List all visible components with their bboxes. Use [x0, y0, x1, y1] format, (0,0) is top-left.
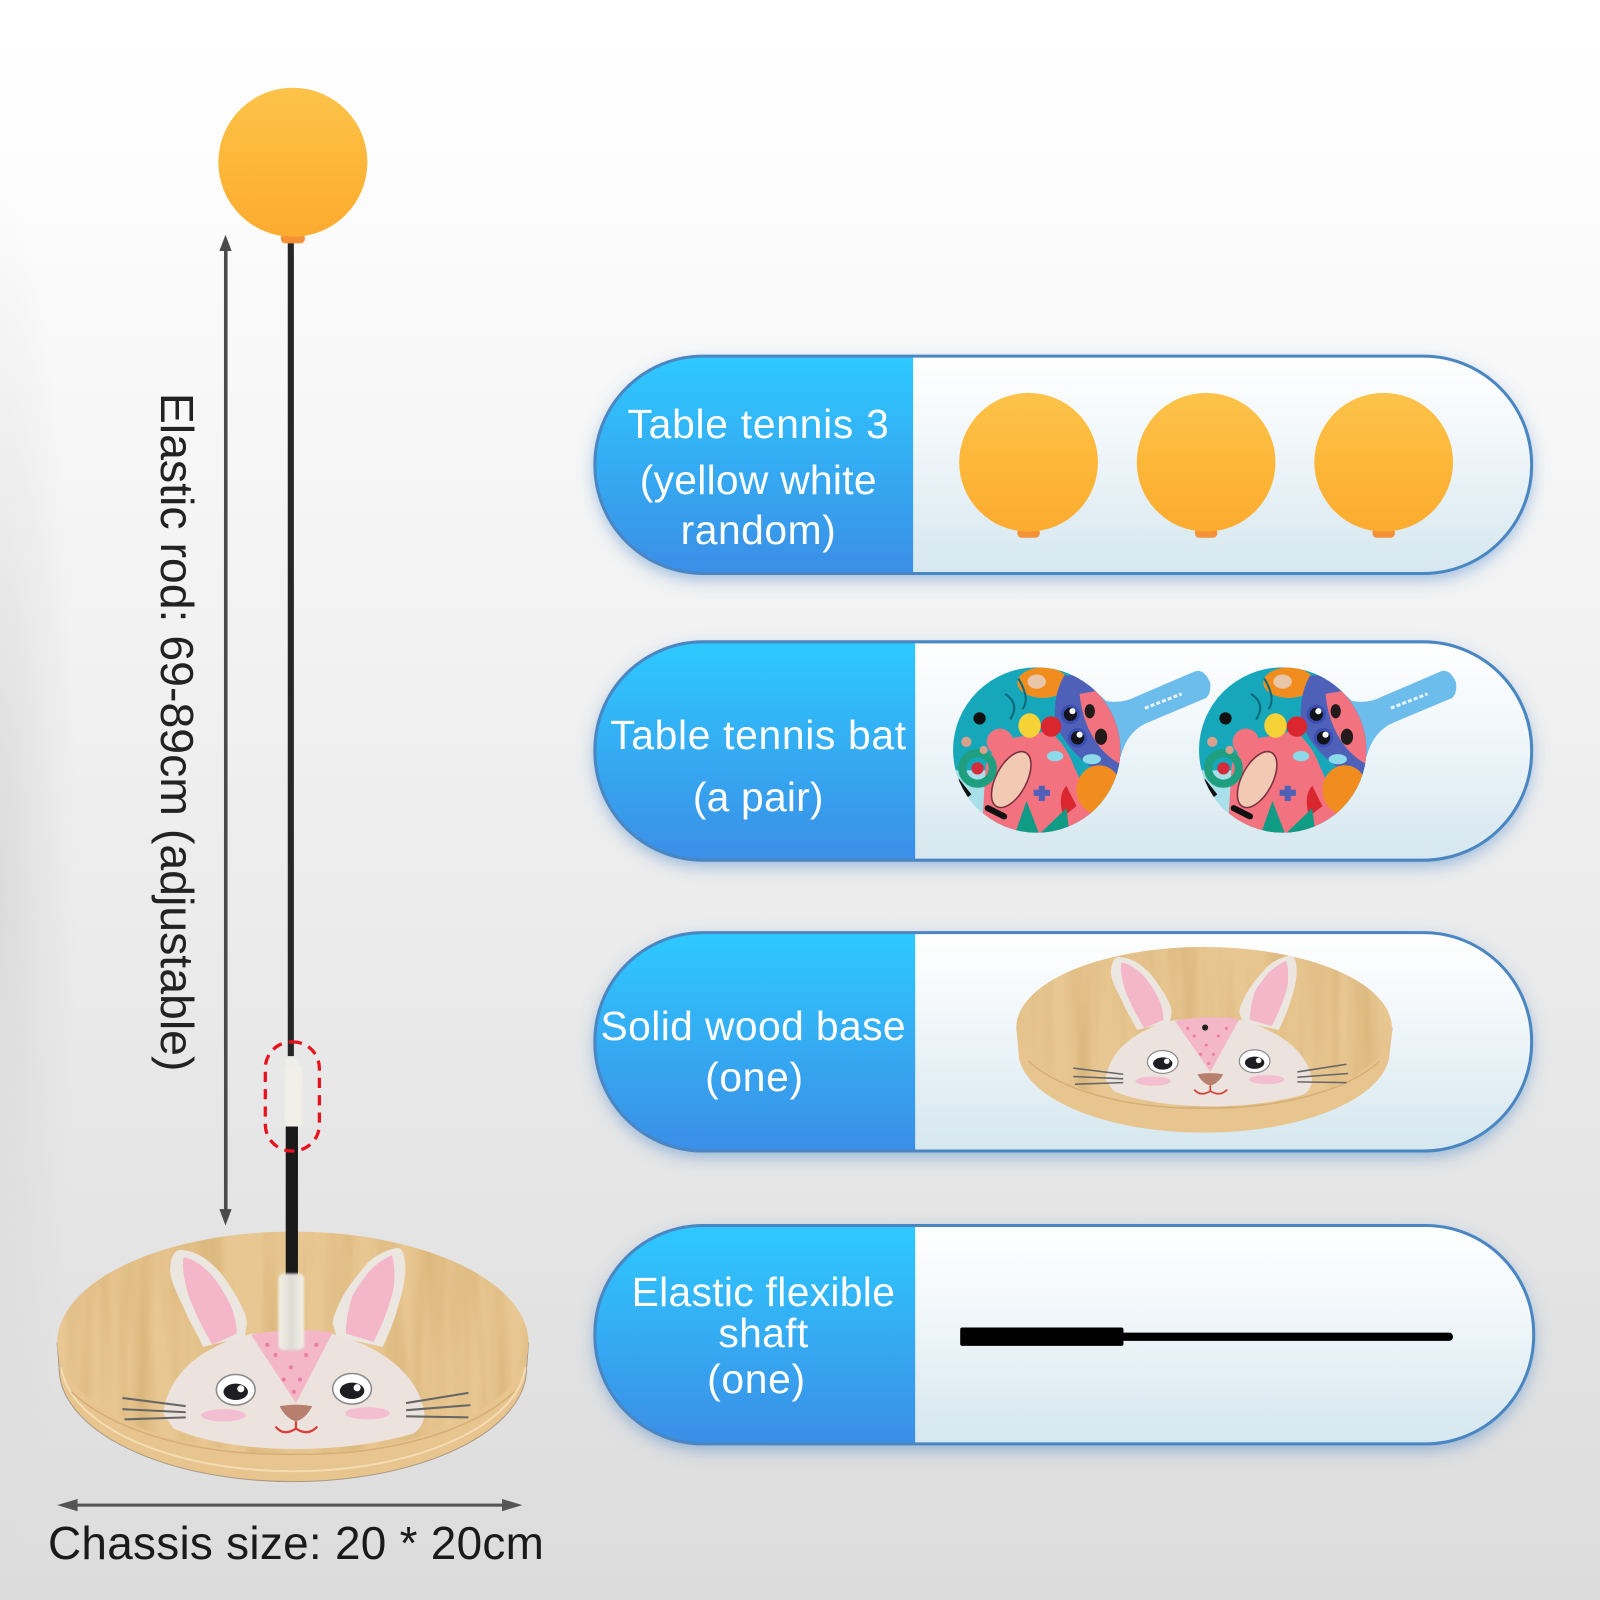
panel: solid wood base: [595, 933, 1532, 1151]
label: chassis size: Chassis size: 20 * 20cm: [48, 1517, 544, 1569]
panel: table tennis bats: [595, 642, 1532, 860]
two bats: [949, 663, 1456, 842]
panel 4 label: shaft: [718, 1310, 809, 1356]
height dimension arrow: [219, 235, 232, 1226]
panel 3 label: (one): [705, 1054, 803, 1100]
chassis dimension arrow: [57, 1499, 522, 1511]
elastic rod with ball: [218, 88, 367, 1350]
shaft: [960, 1328, 1453, 1346]
three balls: [959, 393, 1453, 538]
panel 3 label: Solid wood base: [601, 1003, 906, 1049]
panel 2 label: [610, 712, 907, 820]
panel: elastic flexible shaft: [595, 1226, 1534, 1444]
panel 1 label: [628, 401, 889, 553]
left edge shading: [0, 184, 153, 1592]
panel 1 label: Table tennis 3: [628, 401, 889, 447]
panel 1 label: (yellow white: [640, 457, 877, 503]
panel 4 label: (one): [707, 1356, 805, 1402]
panel 4 label: [632, 1269, 895, 1402]
red dashed connector highlight: [265, 1042, 319, 1151]
panel 2 label: Table tennis bat: [610, 712, 907, 758]
panel 1 label: random): [681, 507, 836, 553]
panel 4 label: Elastic flexible: [632, 1269, 895, 1315]
panel: table tennis balls: [595, 356, 1532, 573]
wooden bunny base: [51, 1224, 541, 1482]
wood base image: [1010, 944, 1398, 1133]
label: elastic rod length: Elastic rod: 69-89cm (adjustable): [151, 393, 203, 1071]
panel 3 label: [601, 1003, 906, 1100]
panel 2 label: (a pair): [693, 774, 823, 820]
